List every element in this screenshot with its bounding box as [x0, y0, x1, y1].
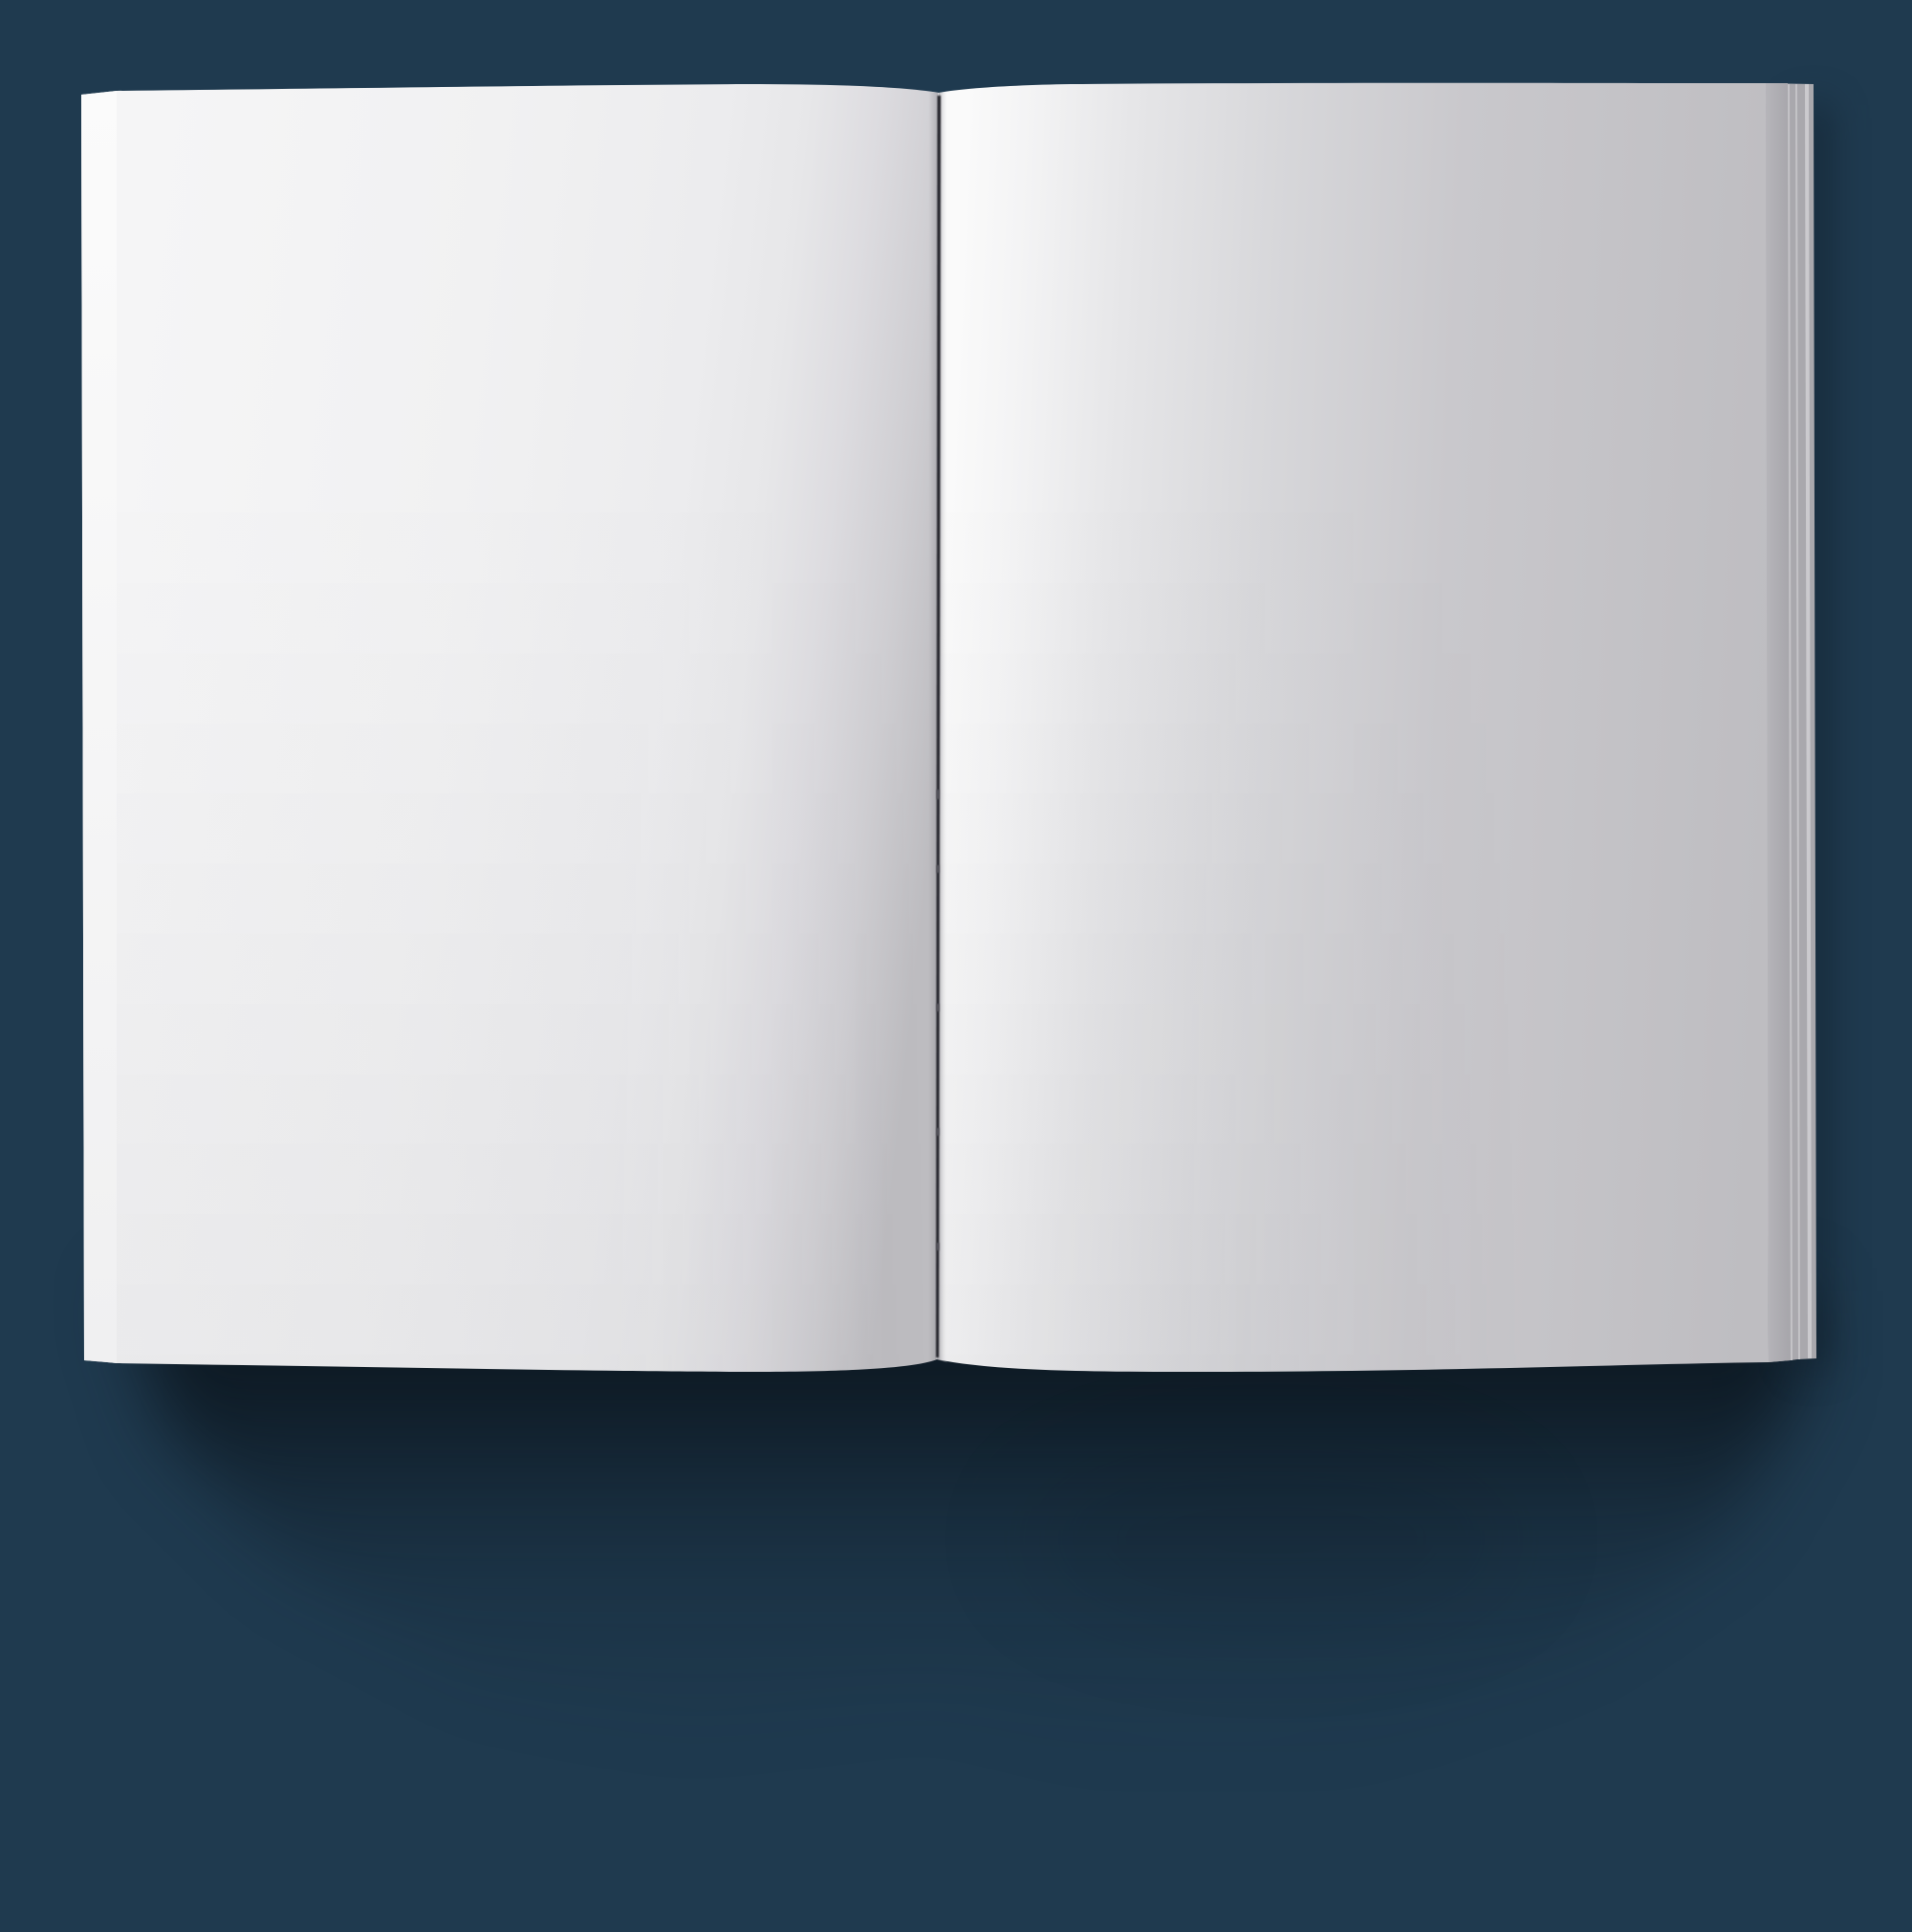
gutter shading left of spine [926, 92, 938, 1364]
spine gutter line [936, 96, 941, 1357]
gutter shading right of spine [937, 91, 950, 1363]
right page bottom shading [945, 1214, 1216, 1372]
left page [81, 84, 939, 1372]
left page cover flap [81, 91, 117, 1363]
left page bottom shading [117, 1214, 670, 1371]
right page stack edges [1764, 83, 1816, 1362]
open blank book on navy background [81, 82, 1847, 1645]
book [81, 83, 1816, 1372]
stitch marks on spine [937, 790, 939, 1250]
cast shadow below and right of book [124, 105, 1830, 1749]
right page [937, 83, 1769, 1372]
